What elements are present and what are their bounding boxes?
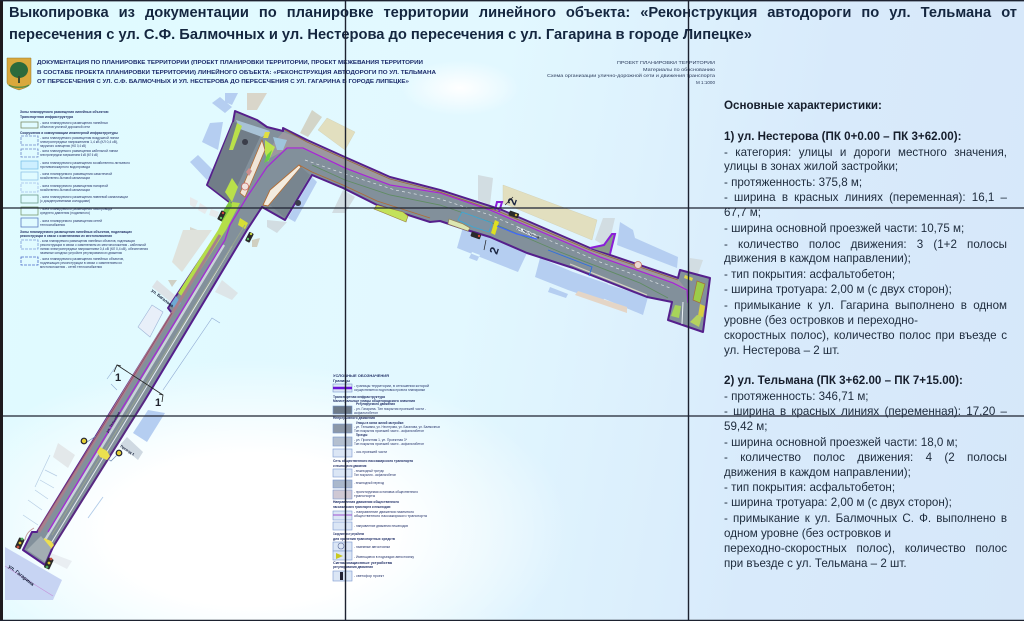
street labels: ул. Багалова	[150, 288, 175, 309]
title	[9, 5, 1017, 43]
characteristics text	[724, 99, 1007, 570]
bottom legend: Сеть общественного пассажирского транспорта	[333, 459, 414, 463]
bottom legend: пассажирского транспорта и пешеходов:	[333, 505, 391, 509]
left legend: линии электропередачи напряжением 0,4 кВ (КЛ 0,4 кВ), обеспечения	[40, 247, 148, 251]
bottom legend: - ул. Проектная 1, ул. Проектная 3*	[354, 438, 408, 442]
characteristics text: переходно-скоростных полос), количество полос	[724, 542, 1007, 555]
left legend: объектов уличной дорожной сети	[40, 125, 90, 129]
project stamp: Схема организации улично-дорожной сети и движения транспорта	[547, 73, 716, 78]
left legend: - зона планируемого размещения линейных объектов,	[40, 257, 124, 261]
bottom legend	[333, 374, 440, 581]
bottom legend: Непрерывного движения	[333, 416, 375, 420]
bottom legend: Улицы в зонах жилой застройки:	[356, 421, 404, 425]
left legend: реконструкции в связи с изменением их местоположения - кабельной	[40, 243, 146, 247]
bottom legend: - границы территории, в отношении которой	[354, 384, 429, 388]
project stamp: Материалы по обоснованию	[643, 67, 715, 72]
left legend: хозяйственно-бытовой канализации	[40, 176, 90, 180]
characteristics text: движения в каждом направлении);	[724, 466, 911, 479]
bottom legend: Сигнализационные устройства	[333, 561, 393, 565]
left legend: - зона планируемого размещения воздушной линии	[40, 136, 119, 140]
characteristics text: - категория: улицы и дороги местного значения,	[724, 146, 1007, 159]
characteristics text: - ширина тротуара: 2,00 м (с двух сторон);	[724, 283, 952, 296]
left legend: (с дождеприемными колодцами)	[40, 199, 90, 203]
characteristics text: - количество полос движения: 4 (2 полосы	[724, 451, 1007, 464]
characteristics text: 2) ул. Тельмана (ПК 3+62.00 – ПК 7+15.00):	[724, 374, 963, 387]
street labels: ул. Нестерова	[517, 226, 540, 240]
bottom legend: - направление движения пешеходов	[354, 524, 408, 528]
bottom legend: - светофор проект	[354, 574, 384, 578]
characteristics text: 67,7 м;	[724, 206, 761, 219]
section marks: 2	[505, 196, 520, 207]
coat of arms	[7, 58, 31, 90]
left legend: - зона планируемого размещения самотечной	[40, 172, 112, 176]
characteristics text: скоростных полос), количество полос при въезде с	[724, 329, 1007, 342]
left legend: - зона планируемого размещения хозяйственно-питьевого	[40, 161, 130, 165]
left legend: Сооружения и коммуникации инженерной инфраструктуры	[20, 131, 118, 135]
bottom legend: Сооружения и устройства	[333, 532, 365, 536]
project stamp	[547, 60, 716, 85]
bottom legend: Проезды:	[356, 433, 368, 437]
characteristics text: - протяженность: 375,8 м;	[724, 176, 862, 189]
section marks	[114, 196, 520, 409]
bottom legend: - пешеходный переход	[354, 481, 385, 485]
bottom legend: - проектируемая остановка общественного	[354, 490, 418, 494]
left legend: - зона планируемого размещения кабельной линии	[40, 149, 118, 153]
left legend: - зона планируемого размещения ливневой канализации	[40, 195, 128, 199]
characteristics text: движения в каждом направлении);	[724, 252, 911, 265]
bottom legend: Тип покрытия проезжей части - асфальтобетон	[354, 442, 424, 446]
characteristics text: улицы в зонах жилой застройки;	[724, 160, 898, 173]
bottom legend: для хранения транспортных средств	[333, 537, 396, 541]
left legend: - зона планируемого размещения линейных объектов, подлежащих	[40, 239, 135, 243]
street labels: ул. Гагарина	[7, 564, 35, 588]
characteristics text: - примыкание к ул. Гагарина выполнено в одном	[724, 299, 1007, 312]
bottom legend: Границы	[333, 379, 350, 383]
section marks: 1	[155, 397, 161, 409]
left legend: подлежащих реконструкции в связи с изменением их	[40, 261, 122, 265]
left legend: наземные катодных устройств регулирования их движения	[40, 251, 122, 255]
left legend: среднего давления (подземного)	[40, 211, 90, 215]
left legend: наружного освещения (НО 0,4 кВ)	[40, 144, 86, 148]
bottom legend: - направление движения наземного	[354, 510, 414, 514]
left legend: реконструкции в связи с изменениями их местоположения	[20, 234, 112, 238]
purple stubs	[495, 202, 502, 212]
bottom legend: асфальтобетон	[354, 411, 378, 415]
road details	[374, 205, 408, 222]
bottom legend: и пешеходного движения:	[333, 464, 367, 468]
street labels: Проезд 1	[119, 444, 135, 457]
wedge median	[263, 165, 301, 206]
document heading: ОТ ПЕРЕСЕЧЕНИЯ С УЛ. С.Ф. БАЛМОЧНЫХ И УЛ. НЕСТЕРОВА ДО ПЕРЕСЕЧЕНИЯ С УЛ. ГАГАРИНА В ГОРОДЕ ЛИПЕЦКЕ»	[37, 79, 409, 85]
left legend: Транспортная инфраструктура	[20, 115, 74, 119]
bottom legend: общественного пассажирского транспорта	[354, 514, 427, 518]
crossings	[97, 447, 110, 460]
left legend: Зоны планируемого размещения линейных объектов, подлежащих	[20, 230, 132, 234]
traffic lights	[15, 210, 519, 570]
document heading: В СОСТАВЕ ПРОЕКТА ПЛАНИРОВКИ ТЕРРИТОРИИ) ЛИНЕЙНОГО ОБЪЕКТА: «РЕКОНСТРУКЦИЯ АВТОДОРОГИ ПО УЛ. ТЕЛЬМАНА	[37, 68, 436, 76]
bottom legend: - пешеходный тротуар	[354, 469, 384, 473]
east junction	[693, 281, 705, 303]
lower road stripes	[38, 148, 688, 547]
street labels	[7, 226, 540, 588]
Nesterova road lines	[285, 130, 678, 298]
project stamp: М 1:1000	[696, 80, 716, 85]
bottom legend: осуществляется подготовка проекта планировки	[354, 388, 425, 392]
street labels: ул. Тельмана	[105, 410, 121, 434]
bottom legend: транспорта	[354, 494, 375, 498]
top strip along Nesterova	[267, 132, 688, 292]
characteristics text: - ширина в красных линиях (переменная): 17,20 –	[724, 405, 1007, 418]
left legend: Зоны планируемого размещения линейных объектов:	[20, 110, 109, 114]
left legend: - зона планируемого размещения линейных	[40, 121, 108, 125]
characteristics text: 59,42 м;	[724, 420, 767, 433]
bottom legend: Направления движения общественного	[333, 500, 400, 504]
green strips on lower road	[178, 202, 240, 297]
bottom legend: регулирования движения	[333, 565, 373, 569]
left legend: - зона планируемого размещения сетей	[40, 219, 102, 223]
right-of-way boundary	[23, 111, 710, 565]
left legend: электропередачи напряжением 1,4 кВ (КЛ 0,4 кВ),	[40, 140, 118, 144]
bottom legend: - ось проезжей части	[354, 450, 387, 454]
bottom legend: УСЛОВНЫЕ ОБОЗНАЧЕНИЯ	[333, 374, 389, 378]
bottom legend: Магистральные улицы общегородского значения	[333, 399, 415, 403]
document heading: ДОКУМЕНТАЦИЯ ПО ПЛАНИРОВКЕ ТЕРРИТОРИИ (ПРОЕКТ ПЛАНИРОВКИ ТЕРРИТОРИИ, ПРОЕКТ МЕЖЕВАНИЯ ТЕРРИТОРИИ	[37, 60, 423, 66]
characteristics text: - тип покрытия: асфальтобетон;	[724, 268, 895, 281]
left legend: - зона планируемого размещения напорной	[40, 184, 108, 188]
NW junction parking	[208, 122, 260, 202]
document heading	[37, 60, 436, 85]
road plan	[23, 111, 710, 565]
section marks: 2	[487, 245, 502, 256]
bottom legend: - наземные автостоянки	[354, 545, 390, 549]
bottom legend: Регулируемого движения	[356, 402, 395, 406]
left legend	[20, 110, 148, 269]
left legend: местоположения - сетей теплоснабжения	[40, 265, 102, 269]
bottom legend: - ул. Гагарина. Тип покрытия проезжей части -	[354, 407, 427, 411]
bottom legend: - ул. Тельмана, ул. Нестерова, ул. Багалова, ул. Балмочных	[354, 425, 440, 429]
title: пересечения с ул. С.Ф. Балмочных и ул. Нестерова до пересечения с ул. Гагарина в городе Липецке»	[9, 27, 752, 43]
characteristics text: одном уровне (без островков и	[724, 527, 891, 540]
characteristics text: при въезде с ул. Тельмана – 2 шт.	[724, 557, 907, 570]
characteristics text: - ширина тротуара: 2,00 м (с двух сторон);	[724, 496, 952, 509]
characteristics text: - примыкание к ул. Балмочных С. Ф. выполнено в	[724, 512, 1007, 525]
ул. Гагарина block	[5, 547, 62, 600]
bottom legend: Тип покрытия - асфальтобетон	[354, 473, 396, 477]
left legend: противопожарного водопровода	[40, 165, 90, 169]
project stamp: ПРОЕКТ ПЛАНИРОВКИ ТЕРРИТОРИИ	[617, 60, 715, 65]
characteristics text: - протяженность: 346,71 м;	[724, 390, 869, 403]
characteristics text: - тип покрытия: асфальтобетон;	[724, 481, 895, 494]
characteristics text: ул. Нестерова – 2 шт.	[724, 344, 839, 357]
characteristics text: Основные характеристики:	[724, 99, 882, 112]
left legend: хозяйственно-бытовой канализации	[40, 188, 90, 192]
bottom legend: Тип покрытия проезжей части - асфальтобетон	[354, 429, 424, 433]
surrounding buildings	[5, 93, 703, 600]
characteristics text: - количество полос движения: 3 (1+2 полосы	[724, 238, 1007, 251]
characteristics text: - ширина основной проезжей части: 10,75 м;	[724, 222, 964, 235]
left legend: теплоснабжения	[40, 223, 65, 227]
characteristics text: 1) ул. Нестерова (ПК 0+0.00 – ПК 3+62.00):	[724, 130, 961, 143]
section marks: 1	[115, 372, 121, 384]
title: Выкопировка из документации по планировке территории линейного объекта: «Реконструкция автодороги по ул. Тельмана от	[9, 5, 1017, 21]
left legend: - зона планируемого размещения газопровода	[40, 207, 112, 211]
characteristics text: уровне (без островков и переходно-	[724, 314, 918, 327]
bottom legend: - Имеющиеся в подъездах автостоянку	[354, 555, 414, 559]
characteristics text: - ширина основной проезжей части: 18,0 м;	[724, 436, 958, 449]
characteristics text: - ширина в красных линиях (переменная): 16,1 –	[724, 191, 1007, 204]
left legend: электропередачи напряжением 6 кВ (КЛ 6 кВ)	[40, 153, 98, 157]
bottom legend: Транспортная инфраструктура	[333, 395, 386, 399]
